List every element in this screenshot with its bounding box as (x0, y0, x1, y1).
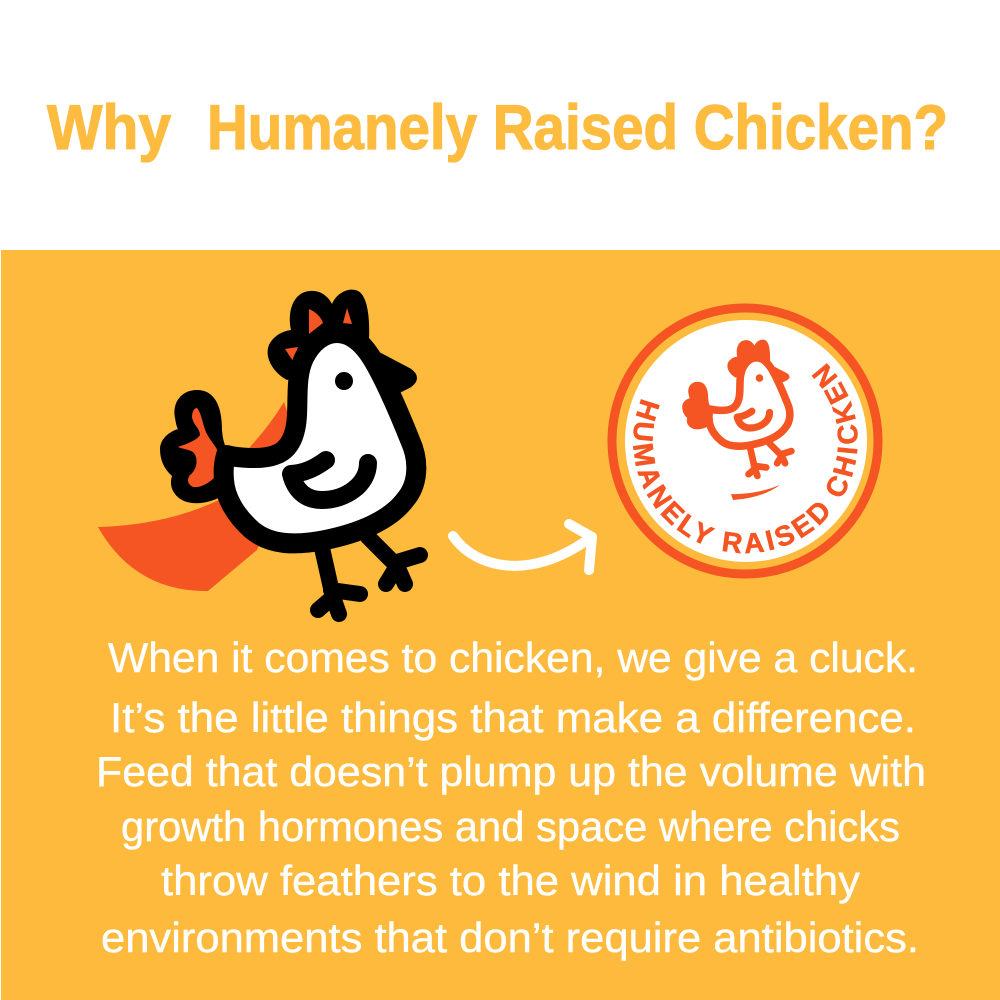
body (224, 333, 416, 543)
badge white disc (625, 320, 867, 562)
badge curved text: HUMANELY RAISED CHICKEN (632, 363, 858, 554)
body text: throw feathers to the wind in healthy (161, 857, 860, 904)
beak (372, 350, 416, 393)
cape (98, 402, 300, 591)
tail (160, 390, 240, 503)
badge brush mark (731, 485, 780, 500)
badge chicken (682, 340, 791, 476)
body text (96, 634, 926, 961)
arrow (453, 524, 592, 570)
comb (268, 290, 369, 380)
body text: environments that don’t require antibiotics. (101, 914, 919, 961)
badge ring (612, 308, 878, 574)
body text: growth hormones and space where chicks (121, 803, 900, 850)
body text: Feed that doesn’t plump up the volume with (96, 748, 926, 795)
icon: caped chicken (98, 290, 420, 614)
panel: yellow background (1, 250, 1000, 1000)
body text: When it comes to chicken, we give a cluck. (108, 634, 918, 681)
badge: humanely raised chicken (608, 304, 882, 578)
wing (291, 460, 368, 500)
title: Why (47, 93, 171, 163)
eye (335, 372, 353, 390)
body text: It’s the little things that make a difference. (110, 694, 916, 741)
legs (318, 537, 420, 614)
